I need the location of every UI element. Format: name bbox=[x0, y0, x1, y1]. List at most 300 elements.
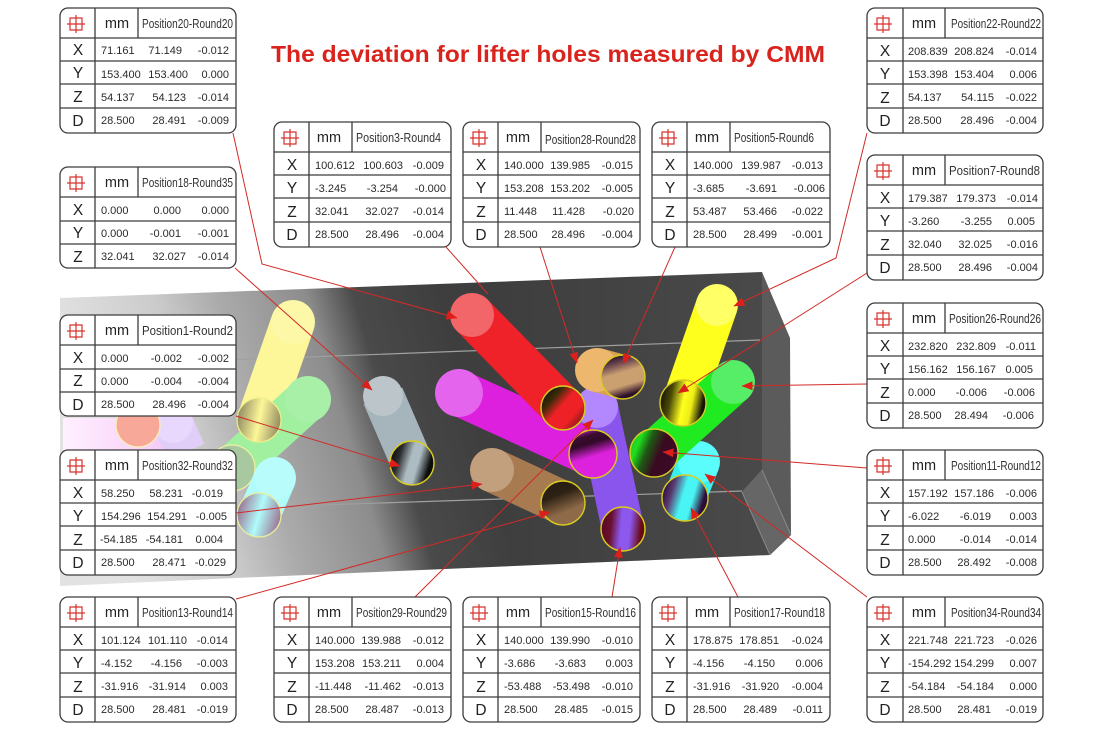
table: Position7-Round8: 0.005 bbox=[1007, 216, 1035, 228]
table: Position11-Round12: D bbox=[879, 555, 891, 572]
table: Position11-Round12: 157.192 bbox=[908, 488, 948, 500]
table: Position15-Round16: -0.015 bbox=[602, 704, 633, 716]
table: Position34-Round34: Position34-Round34 bbox=[951, 606, 1041, 620]
table: Position15-Round16 bbox=[463, 597, 640, 722]
table: Position11-Round12: -0.008 bbox=[1006, 557, 1037, 569]
table: Position20-Round20 bbox=[60, 8, 236, 133]
table: Position34-Round34: -0.026 bbox=[1006, 635, 1037, 647]
table: Position32-Round32: 0.004 bbox=[195, 534, 223, 546]
table: Position3-Round4: Position3-Round4 bbox=[356, 131, 441, 145]
table: Position32-Round32: Z bbox=[73, 532, 83, 549]
table: Position17-Round18: D bbox=[664, 702, 676, 719]
table: Position13-Round14 bbox=[60, 597, 236, 722]
table: Position17-Round18: 178.875 bbox=[693, 635, 733, 647]
tube: green bbox=[630, 360, 755, 477]
table: Position22-Round22: 54.137 bbox=[908, 92, 942, 104]
table: Position20-Round20: -0.014 bbox=[198, 92, 229, 104]
table: Position28-Round28 bbox=[463, 122, 640, 247]
table: Position29-Round29: X bbox=[287, 632, 298, 649]
table: Position5-Round6: D bbox=[664, 227, 676, 244]
tube: brown bbox=[470, 448, 585, 525]
table: Position28-Round28: 153.202 bbox=[550, 183, 590, 195]
table: Position5-Round6: 139.987 bbox=[741, 160, 781, 172]
table: Position15-Round16: 139.990 bbox=[550, 635, 590, 647]
table: Position11-Round12: 28.492 bbox=[957, 557, 991, 569]
table: Position34-Round34: 221.723 bbox=[954, 635, 994, 647]
table: Position18-Round35: 0.000 bbox=[153, 205, 181, 217]
table: Position29-Round29: 153.211 bbox=[362, 658, 401, 670]
table: Position34-Round34: 28.500 bbox=[908, 704, 942, 716]
table: Position5-Round6 bbox=[652, 122, 830, 247]
table: Position18-Round35: 32.027 bbox=[152, 251, 186, 263]
table: Position17-Round18: Z bbox=[665, 679, 675, 696]
table: Position13-Round14: Y bbox=[73, 655, 83, 672]
table: Position1-Round2: mm bbox=[105, 323, 129, 339]
table: Position5-Round6: X bbox=[665, 157, 676, 174]
table: Position18-Round35: 32.041 bbox=[101, 251, 135, 263]
tube: purple bbox=[576, 386, 645, 551]
table: Position22-Round22: 208.839 bbox=[908, 46, 948, 58]
table: Position18-Round35: Y bbox=[73, 225, 83, 242]
table: Position18-Round35: Z bbox=[73, 249, 83, 266]
table: Position20-Round20: -0.009 bbox=[198, 115, 229, 127]
table: Position20-Round20: 0.000 bbox=[201, 69, 229, 81]
table: Position1-Round2: 0.000 bbox=[101, 376, 129, 388]
table: Position32-Round32: 58.250 bbox=[101, 488, 135, 500]
table: Position11-Round12: -6.022 bbox=[908, 511, 939, 523]
table: Position11-Round12: 0.000 bbox=[908, 534, 936, 546]
table: Position7-Round8: D bbox=[879, 260, 891, 277]
tube: tan bbox=[575, 348, 645, 399]
table: Position28-Round28: Z bbox=[476, 204, 486, 221]
table: Position1-Round2: 28.496 bbox=[152, 399, 186, 411]
table: Position5-Round6: -3.691 bbox=[746, 183, 777, 195]
table: Position15-Round16: 28.500 bbox=[504, 704, 538, 716]
table: Position3-Round4: 100.603 bbox=[363, 160, 403, 172]
table: Position13-Round14: D bbox=[72, 702, 84, 719]
table: Position22-Round22: Z bbox=[880, 90, 890, 107]
table: Position29-Round29: -0.012 bbox=[413, 635, 444, 647]
table: Position22-Round22: X bbox=[880, 43, 891, 60]
hole: yellow bbox=[660, 380, 706, 426]
table: Position5-Round6: Y bbox=[665, 180, 675, 197]
table: Position18-Round35: -0.001 bbox=[150, 228, 181, 240]
table: Position17-Round18: -4.150 bbox=[744, 658, 775, 670]
table: Position29-Round29: -11.462 bbox=[364, 681, 401, 693]
table: Position32-Round32: X bbox=[73, 485, 84, 502]
table: Position7-Round8: -3.260 bbox=[908, 216, 939, 228]
table: Position28-Round28: -0.005 bbox=[602, 183, 633, 195]
table: Position22-Round22: 153.404 bbox=[954, 69, 994, 81]
table: Position32-Round32: Y bbox=[73, 508, 83, 525]
table: Position28-Round28: -0.004 bbox=[602, 229, 633, 241]
table: Position29-Round29: 28.500 bbox=[315, 704, 349, 716]
table: Position29-Round29: Position29-Round29 bbox=[356, 606, 447, 620]
table: Position13-Round14: -4.156 bbox=[151, 658, 182, 670]
table: Position26-Round26: X bbox=[880, 338, 891, 355]
table: Position15-Round16: 28.485 bbox=[554, 704, 588, 716]
table: Position20-Round20: 28.491 bbox=[152, 115, 186, 127]
table: Position20-Round20: Y bbox=[73, 65, 83, 82]
table: Position34-Round34: Z bbox=[880, 679, 890, 696]
table: Position18-Round35: 0.000 bbox=[101, 228, 129, 240]
table: Position26-Round26: -0.006 bbox=[956, 387, 987, 399]
table: Position32-Round32: 154.296 bbox=[101, 511, 141, 523]
3D part model with lifter holes bbox=[60, 272, 791, 586]
table: Position34-Round34: 154.299 bbox=[954, 658, 994, 670]
table: Position22-Round22: mm bbox=[912, 16, 936, 32]
table: Position13-Round14: X bbox=[73, 632, 84, 649]
table: Position7-Round8: 179.387 bbox=[908, 193, 948, 205]
table: Position20-Round20: 71.149 bbox=[148, 45, 182, 57]
table: Position13-Round14: 0.003 bbox=[200, 681, 228, 693]
table: Position22-Round22: 54.115 bbox=[961, 92, 994, 104]
table: Position11-Round12: 0.003 bbox=[1009, 511, 1037, 523]
table: Position3-Round4: -0.004 bbox=[413, 229, 444, 241]
table: Position22-Round22: 28.496 bbox=[960, 115, 994, 127]
table: Position1-Round2: Z bbox=[73, 373, 83, 390]
table: Position15-Round16: Position15-Round16 bbox=[545, 606, 636, 620]
table: Position13-Round14: -31.916 bbox=[101, 681, 138, 693]
table: Position17-Round18: -0.004 bbox=[792, 681, 823, 693]
table: Position7-Round8: Z bbox=[880, 237, 890, 254]
table: Position5-Round6: 140.000 bbox=[693, 160, 733, 172]
table: Position32-Round32: 58.231 bbox=[149, 488, 183, 500]
table: Position18-Round35: X bbox=[73, 202, 84, 219]
table: Position3-Round4: mm bbox=[317, 130, 341, 146]
table: Position32-Round32 bbox=[60, 450, 236, 575]
table: Position29-Round29: -0.013 bbox=[413, 704, 444, 716]
table: Position7-Round8: 179.373 bbox=[956, 193, 996, 205]
table: Position28-Round28: Y bbox=[476, 180, 486, 197]
table: Position15-Round16: -3.683 bbox=[555, 658, 586, 670]
table: Position26-Round26: -0.011 bbox=[1006, 341, 1036, 353]
table: Position1-Round2: -0.002 bbox=[151, 353, 182, 365]
table: Position34-Round34: 0.007 bbox=[1009, 658, 1037, 670]
table: Position34-Round34: X bbox=[880, 632, 891, 649]
table: Position7-Round8: 32.040 bbox=[908, 239, 942, 251]
table: Position32-Round32: Position32-Round32 bbox=[142, 459, 233, 473]
table: Position32-Round32: -0.019 bbox=[192, 488, 223, 500]
tube: magenta bbox=[435, 369, 617, 478]
table: Position3-Round4: -3.254 bbox=[367, 183, 398, 195]
table: Position28-Round28: 28.496 bbox=[551, 229, 585, 241]
table: Position32-Round32: 28.471 bbox=[152, 557, 186, 569]
table: Position18-Round35: 0.000 bbox=[101, 205, 129, 217]
table: Position13-Round14: Z bbox=[73, 679, 83, 696]
table: Position34-Round34: 221.748 bbox=[908, 635, 948, 647]
table: Position20-Round20: -0.012 bbox=[198, 45, 229, 57]
table: Position28-Round28: 28.500 bbox=[504, 229, 538, 241]
table: Position34-Round34: -54.184 bbox=[908, 681, 945, 693]
table: Position7-Round8: -0.014 bbox=[1007, 193, 1038, 205]
table: Position17-Round18: -0.011 bbox=[793, 704, 823, 716]
table: Position20-Round20: 153.400 bbox=[101, 69, 141, 81]
table: Position15-Round16: 0.003 bbox=[605, 658, 633, 670]
table: Position29-Round29 bbox=[274, 597, 451, 722]
table: Position1-Round2: -0.004 bbox=[198, 399, 229, 411]
table: Position5-Round6: Position5-Round6 bbox=[734, 131, 814, 145]
table: Position5-Round6: 53.466 bbox=[743, 206, 777, 218]
table: Position20-Round20: 54.123 bbox=[152, 92, 186, 104]
table: Position18-Round35: -0.001 bbox=[198, 228, 229, 240]
table: Position20-Round20: 71.161 bbox=[101, 45, 135, 57]
table: Position15-Round16: -0.010 bbox=[602, 681, 633, 693]
table: Position7-Round8: Y bbox=[880, 213, 890, 230]
table: Position17-Round18: 28.500 bbox=[693, 704, 727, 716]
table: Position13-Round14: 28.481 bbox=[152, 704, 186, 716]
table: Position1-Round2: X bbox=[73, 350, 84, 367]
table: Position5-Round6: mm bbox=[695, 130, 719, 146]
table: Position28-Round28: 140.000 bbox=[504, 160, 544, 172]
table: Position5-Round6: 28.500 bbox=[693, 229, 727, 241]
table: Position34-Round34: -54.184 bbox=[957, 681, 994, 693]
table: Position17-Round18 bbox=[652, 597, 830, 722]
table: Position11-Round12 bbox=[867, 450, 1043, 575]
table: Position20-Round20: X bbox=[73, 42, 84, 59]
table: Position7-Round8: -3.255 bbox=[961, 216, 992, 228]
table: Position20-Round20: D bbox=[72, 113, 84, 130]
table: Position5-Round6: -3.685 bbox=[693, 183, 724, 195]
table: Position32-Round32: mm bbox=[105, 458, 129, 474]
table: Position26-Round26: 0.000 bbox=[908, 387, 936, 399]
faded tubes on the left bbox=[63, 300, 331, 537]
table: Position17-Round18: -4.156 bbox=[693, 658, 724, 670]
table: Position13-Round14: 101.110 bbox=[148, 635, 187, 647]
part body bbox=[60, 272, 791, 586]
table: Position11-Round12: mm bbox=[912, 458, 936, 474]
table: Position3-Round4: 28.500 bbox=[315, 229, 349, 241]
table: Position26-Round26: -0.006 bbox=[1004, 387, 1035, 399]
table: Position18-Round35 bbox=[60, 167, 236, 268]
table: Position13-Round14: mm bbox=[105, 605, 129, 621]
table: Position32-Round32: 28.500 bbox=[101, 557, 135, 569]
table: Position17-Round18: 0.006 bbox=[795, 658, 823, 670]
table: Position3-Round4: -0.009 bbox=[413, 160, 444, 172]
table: Position5-Round6: 53.487 bbox=[693, 206, 727, 218]
table: Position13-Round14: -0.003 bbox=[197, 658, 228, 670]
table: Position22-Round22: 208.824 bbox=[954, 46, 994, 58]
table: Position28-Round28: Position28-Round28 bbox=[545, 133, 636, 147]
table: Position18-Round35: Position18-Round35 bbox=[142, 176, 233, 190]
table: Position29-Round29: Z bbox=[287, 679, 297, 696]
table: Position13-Round14: Position13-Round14 bbox=[142, 606, 233, 620]
table: Position7-Round8: 28.496 bbox=[958, 262, 992, 274]
table: Position5-Round6: Z bbox=[665, 204, 675, 221]
title: The deviation for lifter holes measured by CMM bbox=[271, 41, 825, 67]
table: Position22-Round22: Position22-Round22 bbox=[951, 17, 1041, 31]
table: Position18-Round35: mm bbox=[105, 175, 129, 191]
table: Position34-Round34: 0.000 bbox=[1009, 681, 1037, 693]
table: Position26-Round26: 156.162 bbox=[908, 364, 948, 376]
table: Position34-Round34: mm bbox=[912, 605, 936, 621]
table: Position17-Round18: 178.851 bbox=[739, 635, 779, 647]
table: Position26-Round26: mm bbox=[912, 311, 936, 327]
table: Position7-Round8: 28.500 bbox=[908, 262, 942, 274]
table: Position34-Round34 bbox=[867, 597, 1043, 722]
table: Position20-Round20: mm bbox=[105, 16, 129, 32]
table: Position20-Round20: 54.137 bbox=[101, 92, 135, 104]
table: Position26-Round26 bbox=[867, 303, 1043, 428]
table: Position11-Round12: -6.019 bbox=[960, 511, 991, 523]
table: Position1-Round2 bbox=[60, 315, 236, 416]
table: Position32-Round32: -0.005 bbox=[196, 511, 227, 523]
table: Position3-Round4: D bbox=[286, 227, 298, 244]
table: Position17-Round18: -31.916 bbox=[693, 681, 730, 693]
table: Position3-Round4: X bbox=[287, 157, 298, 174]
table: Position13-Round14: 101.124 bbox=[101, 635, 141, 647]
table: Position5-Round6: -0.006 bbox=[794, 183, 825, 195]
table: Position3-Round4: Y bbox=[287, 180, 297, 197]
table: Position22-Round22: 153.398 bbox=[908, 69, 948, 81]
table: Position15-Round16: -53.498 bbox=[553, 681, 590, 693]
table: Position7-Round8 bbox=[867, 155, 1043, 280]
table: Position26-Round26: 28.500 bbox=[908, 410, 942, 422]
table: Position22-Round22 bbox=[867, 8, 1043, 133]
table: Position22-Round22: -0.022 bbox=[1006, 92, 1037, 104]
table: Position28-Round28: 139.985 bbox=[550, 160, 590, 172]
tube: red bbox=[450, 293, 585, 430]
table: Position28-Round28: 153.208 bbox=[504, 183, 544, 195]
table: Position1-Round2: 28.500 bbox=[101, 399, 135, 411]
table: Position28-Round28: X bbox=[476, 157, 487, 174]
table: Position17-Round18: X bbox=[665, 632, 676, 649]
table: Position3-Round4: 28.496 bbox=[365, 229, 399, 241]
table: Position29-Round29: 28.487 bbox=[365, 704, 399, 716]
table: Position15-Round16: Y bbox=[476, 655, 486, 672]
leader arrows bbox=[233, 133, 867, 599]
table: Position26-Round26: Position26-Round26 bbox=[949, 312, 1041, 326]
table: Position26-Round26: 232.820 bbox=[908, 341, 948, 353]
table: Position22-Round22: 28.500 bbox=[908, 115, 942, 127]
table: Position1-Round2: -0.004 bbox=[151, 376, 182, 388]
table: Position11-Round12: 28.500 bbox=[908, 557, 942, 569]
table: Position13-Round14: -0.019 bbox=[197, 704, 228, 716]
table: Position29-Round29: 0.004 bbox=[416, 658, 444, 670]
table: Position3-Round4: -0.014 bbox=[413, 206, 444, 218]
table: Position26-Round26: 0.005 bbox=[1005, 364, 1033, 376]
table: Position29-Round29: -11.448 bbox=[315, 681, 352, 693]
table: Position1-Round2: -0.002 bbox=[198, 353, 229, 365]
table: Position28-Round28: 11.428 bbox=[552, 206, 585, 218]
table: Position7-Round8: X bbox=[880, 190, 891, 207]
table: Position29-Round29: 153.208 bbox=[315, 658, 355, 670]
table: Position5-Round6: -0.013 bbox=[792, 160, 823, 172]
tube: grey bbox=[363, 376, 434, 485]
table: Position17-Round18: Y bbox=[665, 655, 675, 672]
table: Position28-Round28: 11.448 bbox=[504, 206, 537, 218]
table: Position29-Round29: mm bbox=[317, 605, 341, 621]
table: Position5-Round6: -0.022 bbox=[792, 206, 823, 218]
table: Position26-Round26: D bbox=[879, 408, 891, 425]
table: Position13-Round14: -4.152 bbox=[101, 658, 132, 670]
table: Position17-Round18: Position17-Round18 bbox=[734, 606, 825, 620]
table: Position20-Round20: Z bbox=[73, 89, 83, 106]
table: Position1-Round2: Position1-Round2 bbox=[142, 324, 233, 338]
table: Position11-Round12: -0.014 bbox=[1006, 534, 1037, 546]
table: Position1-Round2: D bbox=[72, 397, 84, 414]
table: Position28-Round28: D bbox=[475, 227, 487, 244]
table: Position7-Round8: mm bbox=[912, 163, 936, 179]
table: Position34-Round34: -0.019 bbox=[1006, 704, 1037, 716]
table: Position29-Round29: Y bbox=[287, 655, 297, 672]
table: Position7-Round8: -0.016 bbox=[1007, 239, 1038, 251]
table: Position11-Round12: 157.186 bbox=[954, 488, 994, 500]
table: Position18-Round35: 0.000 bbox=[201, 205, 229, 217]
table: Position1-Round2: -0.004 bbox=[198, 376, 229, 388]
table: Position20-Round20: 153.400 bbox=[148, 69, 188, 81]
table: Position17-Round18: -0.024 bbox=[792, 635, 823, 647]
table: Position11-Round12: Z bbox=[880, 532, 890, 549]
table: Position32-Round32: -54.185 bbox=[100, 534, 137, 546]
table: Position3-Round4: -0.000 bbox=[415, 183, 446, 195]
table: Position17-Round18: 28.489 bbox=[743, 704, 777, 716]
table: Position15-Round16: Z bbox=[476, 679, 486, 696]
table: Position22-Round22: 0.006 bbox=[1009, 69, 1037, 81]
table: Position3-Round4: Z bbox=[287, 204, 297, 221]
table: Position22-Round22: -0.014 bbox=[1006, 46, 1037, 58]
table: Position11-Round12: Position11-Round12 bbox=[951, 459, 1041, 473]
table: Position26-Round26: Y bbox=[880, 361, 890, 378]
table: Position1-Round2: 0.000 bbox=[101, 353, 129, 365]
table: Position20-Round20: Position20-Round20 bbox=[142, 17, 233, 31]
table: Position26-Round26: 232.809 bbox=[956, 341, 996, 353]
table: Position11-Round12: -0.006 bbox=[1006, 488, 1037, 500]
table: Position28-Round28: mm bbox=[506, 130, 530, 146]
table: Position18-Round35: -0.014 bbox=[198, 251, 229, 263]
table: Position34-Round34: D bbox=[879, 702, 891, 719]
table: Position15-Round16: -53.488 bbox=[504, 681, 541, 693]
table: Position15-Round16: D bbox=[475, 702, 487, 719]
table: Position11-Round12: -0.014 bbox=[960, 534, 991, 546]
table: Position34-Round34: Y bbox=[880, 655, 890, 672]
table: Position32-Round32: 154.291 bbox=[147, 511, 187, 523]
table: Position22-Round22: D bbox=[879, 113, 891, 130]
table: Position15-Round16: X bbox=[476, 632, 487, 649]
table: Position13-Round14: -31.914 bbox=[149, 681, 186, 693]
table: Position32-Round32: D bbox=[72, 555, 84, 572]
table: Position5-Round6: 28.499 bbox=[743, 229, 777, 241]
table: Position7-Round8: -0.004 bbox=[1007, 262, 1038, 274]
table: Position3-Round4: 100.612 bbox=[315, 160, 355, 172]
table: Position29-Round29: -0.013 bbox=[413, 681, 444, 693]
table: Position15-Round16: mm bbox=[506, 605, 530, 621]
table: Position3-Round4: -3.245 bbox=[315, 183, 346, 195]
table: Position13-Round14: 28.500 bbox=[101, 704, 135, 716]
table: Position32-Round32: -0.029 bbox=[195, 557, 226, 569]
table: Position15-Round16: -3.686 bbox=[504, 658, 535, 670]
tube: cyan bbox=[662, 441, 720, 521]
table: Position20-Round20: 28.500 bbox=[101, 115, 135, 127]
table: Position26-Round26: 156.167 bbox=[956, 364, 996, 376]
table: Position29-Round29: D bbox=[286, 702, 298, 719]
table: Position7-Round8: 32.025 bbox=[958, 239, 992, 251]
table: Position13-Round14: -0.014 bbox=[197, 635, 228, 647]
table: Position22-Round22: Y bbox=[880, 66, 890, 83]
table: Position28-Round28: -0.020 bbox=[603, 206, 634, 218]
table: Position29-Round29: 139.988 bbox=[361, 635, 401, 647]
table: Position5-Round6: -0.001 bbox=[792, 229, 823, 241]
table: Position26-Round26: -0.006 bbox=[1003, 410, 1034, 422]
table: Position17-Round18: mm bbox=[695, 605, 719, 621]
table: Position3-Round4 bbox=[274, 122, 451, 247]
table: Position32-Round32: -54.181 bbox=[146, 534, 183, 546]
table: Position3-Round4: 32.041 bbox=[315, 206, 349, 218]
table: Position34-Round34: -154.292 bbox=[908, 658, 951, 670]
table: Position3-Round4: 32.027 bbox=[365, 206, 399, 218]
table: Position7-Round8: Position7-Round8 bbox=[949, 164, 1040, 178]
table: Position15-Round16: -0.010 bbox=[602, 635, 633, 647]
